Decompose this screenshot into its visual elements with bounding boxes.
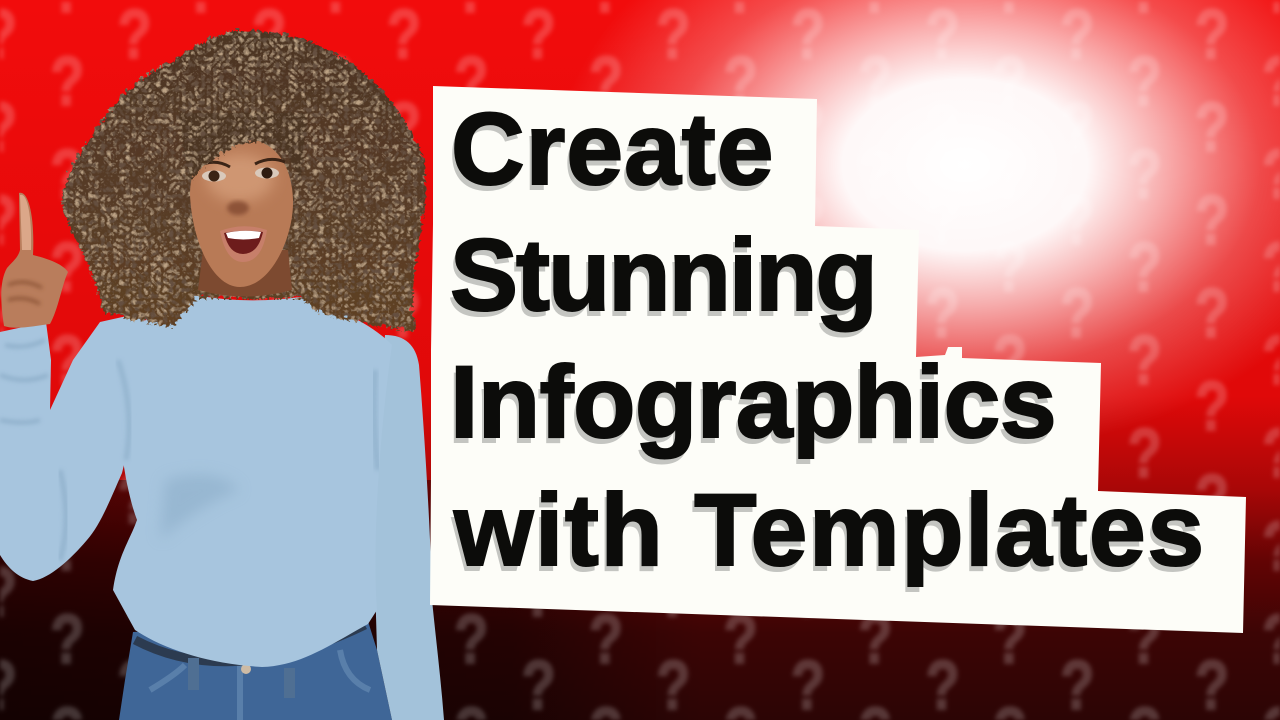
raised hand with pointing finger	[1, 193, 68, 328]
eyes	[202, 168, 279, 182]
title text	[450, 92, 1206, 592]
neck	[198, 250, 292, 296]
right sleeve	[372, 335, 444, 720]
sweater body	[112, 294, 392, 667]
title line 1: Create	[451, 92, 775, 206]
title line 4: with Templates	[454, 473, 1206, 587]
title line 3: Infographics	[450, 345, 1056, 459]
jeans	[119, 618, 392, 720]
hair fringe	[175, 110, 305, 182]
left sleeve	[0, 312, 145, 581]
hair	[60, 28, 423, 330]
face	[190, 138, 293, 287]
mouth	[220, 226, 267, 262]
title line 2: Stunning	[450, 218, 876, 332]
